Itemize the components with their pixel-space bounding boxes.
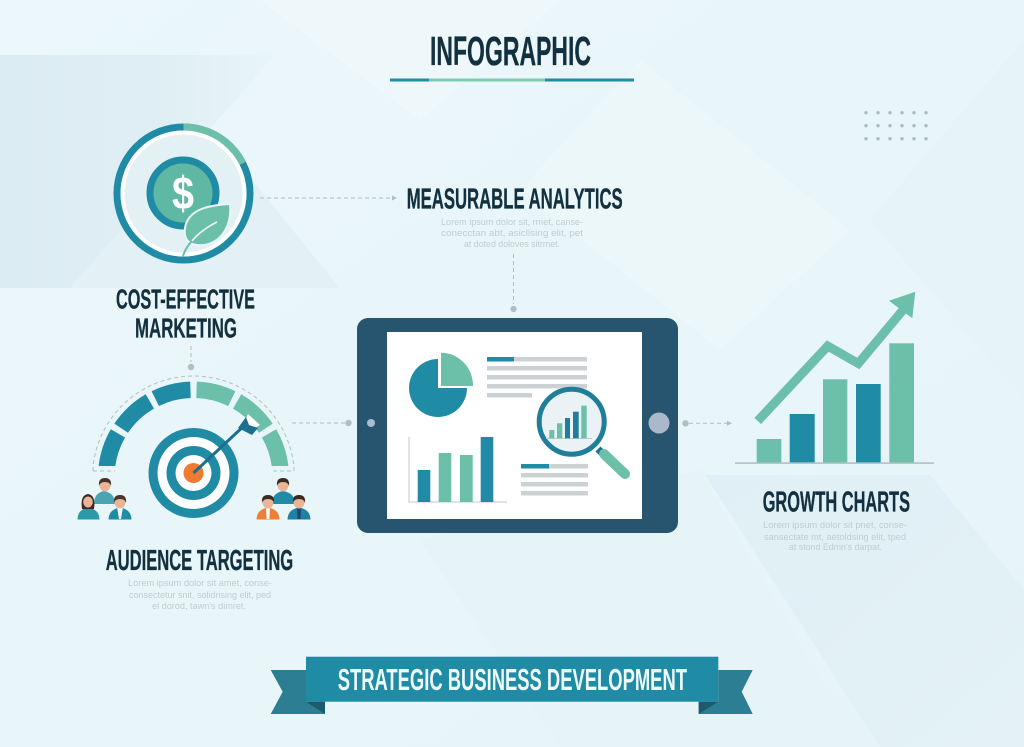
text lines top <box>487 357 587 398</box>
growth arrow <box>758 292 915 421</box>
heading and text: growth charts: GROWTH CHARTS <box>763 487 910 519</box>
title underline <box>390 78 634 82</box>
ribbon tails <box>271 670 753 714</box>
icon: left audience group <box>77 478 132 520</box>
growth bars <box>757 343 914 463</box>
tablet buttons <box>367 412 670 434</box>
heading and text: measurable analytics: Lorem ipsum dolor sit, rmet, canse- <box>441 217 583 228</box>
baseline <box>735 462 934 464</box>
heading and text: audience targeting <box>106 545 293 612</box>
banner ribbon <box>271 657 753 714</box>
icon: cost-effective coin and leaf: $ <box>172 167 194 219</box>
heading and text: audience targeting: Lorem ipsum dolor sit amet, conse- <box>128 578 272 589</box>
connector: marketing to gauge <box>188 346 194 370</box>
text lines bottom <box>521 464 588 496</box>
connector: tablet to growth <box>682 420 732 426</box>
heading and text: measurable analytics: at doted doloves sitrmet. <box>464 239 560 250</box>
heading and text: audience targeting: consectetur snit, solidrising elit, ped <box>129 590 271 601</box>
heading and text: measurable analytics: MEASURABLE ANALYTICS <box>407 183 623 215</box>
tablet <box>357 318 678 533</box>
heading and text: growth charts: sansectate mt, aetoldsing elit, tped <box>764 532 906 543</box>
heading: cost-effective marketing: COST-EFFECTIVE <box>116 283 255 314</box>
icon: cost-effective coin and leaf <box>117 127 250 260</box>
heading and text: growth charts: Lorem ipsum dolor sit pnet, conse- <box>763 520 907 531</box>
heading and text: growth charts: at stond Edmn's darpat. <box>789 542 882 553</box>
pie chart <box>409 353 473 417</box>
heading and text: audience targeting: AUDIENCE TARGETING <box>106 545 293 577</box>
heading and text: audience targeting: el dorod, tawn's dimret. <box>152 601 246 612</box>
bar chart <box>409 437 507 502</box>
target arrow <box>194 414 260 473</box>
gauge left segments <box>99 382 191 466</box>
banner ribbon: STRATEGIC BUSINESS DEVELOPMENT <box>338 662 687 697</box>
tablet screen <box>387 332 642 519</box>
target <box>148 428 238 518</box>
connector: analytics to tablet <box>510 254 517 312</box>
heading and text: growth charts <box>763 487 910 553</box>
heading: cost-effective marketing <box>116 283 255 344</box>
magnifier <box>539 389 625 474</box>
icon: right audience group <box>256 478 311 520</box>
icon: audience gauge <box>93 376 294 518</box>
heading: cost-effective marketing: MARKETING <box>135 313 237 344</box>
arrow: marketing to analytics <box>260 196 397 200</box>
title: INFOGRAPHIC <box>430 28 591 74</box>
gauge dashed outline <box>93 376 294 471</box>
heading and text: measurable analytics <box>407 183 623 250</box>
decorative dot grid <box>864 111 928 140</box>
connector: gauge to tablet <box>292 420 352 426</box>
gauge right segments <box>196 382 288 466</box>
heading and text: measurable analytics: conecctan abt, asiclising elit, pet <box>441 228 583 239</box>
title <box>390 28 634 82</box>
chart: growth bars and arrow <box>735 292 934 464</box>
